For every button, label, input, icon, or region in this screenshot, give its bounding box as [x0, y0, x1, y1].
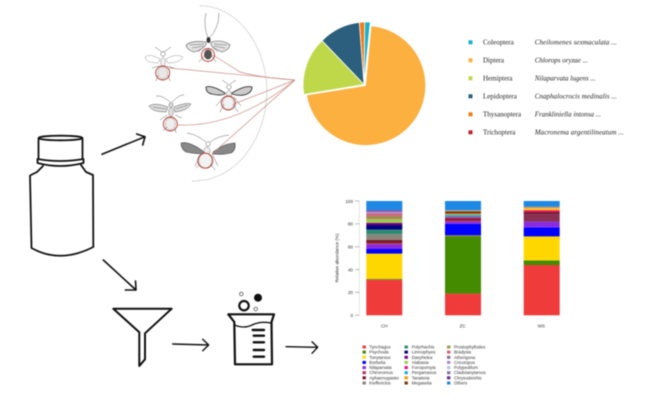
arrow: funnel to beaker: [173, 339, 209, 351]
genus legend: Cricotopus: [454, 360, 476, 365]
genus legend: Others: [454, 380, 468, 386]
pie legend: Diptera: [483, 56, 505, 64]
pie legend: Lepidoptera: [483, 92, 518, 100]
pie legend: Cheilomenes sexmaculata ...: [535, 38, 617, 46]
genus legend: Tanatsria: [412, 375, 430, 380]
icon: funnel: [113, 309, 172, 366]
pie legend: Hemiptera: [483, 74, 513, 82]
genus legend: Borbelia: [369, 360, 386, 365]
insect: right specimen: [206, 80, 252, 112]
bar chart axis: 20: [348, 290, 353, 295]
genus legend: Alabasia: [412, 360, 429, 365]
bar chart axis: 80: [348, 222, 353, 227]
genus legend: Atherigona: [454, 355, 476, 360]
insect: left specimen: [145, 47, 183, 81]
bar chart axis: [334, 199, 359, 318]
genus legend: Bradysia: [454, 350, 472, 355]
pie legend: Thysanoptera: [483, 110, 522, 118]
genus legend: Nilaparvata: [369, 365, 392, 370]
bar category labels: [381, 324, 545, 328]
bar category labels: WS: [538, 324, 545, 328]
genus legend: [362, 344, 487, 386]
pie legend: Trichoptera: [483, 128, 516, 136]
connector lines from insects to pie: [169, 55, 295, 154]
genus legend: Dasyhelea: [412, 355, 433, 360]
bar: ZC: [445, 201, 481, 315]
genus legend: Pergamasus: [412, 370, 437, 375]
pie chart: [303, 22, 426, 145]
genus legend: Forcipomyia: [412, 365, 436, 370]
icon: beaker with bubbles: [228, 292, 274, 364]
bar chart axis: 40: [348, 267, 353, 272]
insect: lower left specimen: [149, 95, 191, 133]
arrow: bottle to funnel: [103, 260, 136, 290]
pie legend: Nilaparvata lugens ...: [534, 74, 596, 82]
bar: WS: [524, 201, 560, 315]
arrow: beaker to bar chart: [286, 342, 318, 353]
bar category labels: CH: [381, 324, 388, 328]
genus legend: Chironomus: [369, 370, 394, 375]
genus legend: Tonytarsus: [369, 355, 391, 360]
icon: sample bottle: [30, 136, 93, 256]
pie legend: [468, 38, 624, 136]
pie legend: Chlorops oryzae ...: [535, 56, 588, 64]
genus legend: Limnophyes: [412, 350, 436, 355]
genus legend: Polypedilum: [454, 365, 478, 370]
genus legend: Aphaenogaster: [369, 375, 400, 380]
pie legend: Macronema argentilineatum ...: [534, 128, 624, 136]
insect highlight circles: [156, 48, 235, 168]
genus legend: Polyrhachis: [412, 344, 435, 350]
bar chart axis: 0: [350, 313, 353, 318]
genus legend: Chrysodeixhis: [454, 375, 482, 380]
arrow: bottle to insects: [102, 134, 145, 154]
bar category labels: ZC: [459, 324, 466, 328]
bar: CH: [366, 201, 402, 315]
dotted arc around insects: [192, 6, 267, 181]
insect: bottom specimen: [181, 133, 235, 170]
genus legend: Psychoda: [369, 350, 389, 355]
bar chart axis: 100: [345, 199, 353, 204]
bar chart axis: Relative abundance (%): [334, 233, 340, 283]
pie legend: Cnaphalocrocis medinalis ...: [535, 92, 617, 100]
insect: top specimen: [186, 13, 230, 62]
genus legend: Prostophyllodes: [454, 344, 486, 350]
pie legend: Coleoptera: [483, 38, 515, 46]
genus legend: Kieffericlus: [369, 380, 391, 386]
genus legend: Tynchagus: [369, 344, 391, 350]
bar chart axis: 60: [348, 244, 353, 249]
pie legend: Frankliniella intonsa ...: [534, 110, 601, 118]
genus legend: Megaselia: [412, 380, 432, 386]
genus legend: Cladotanytarsus: [454, 370, 487, 375]
